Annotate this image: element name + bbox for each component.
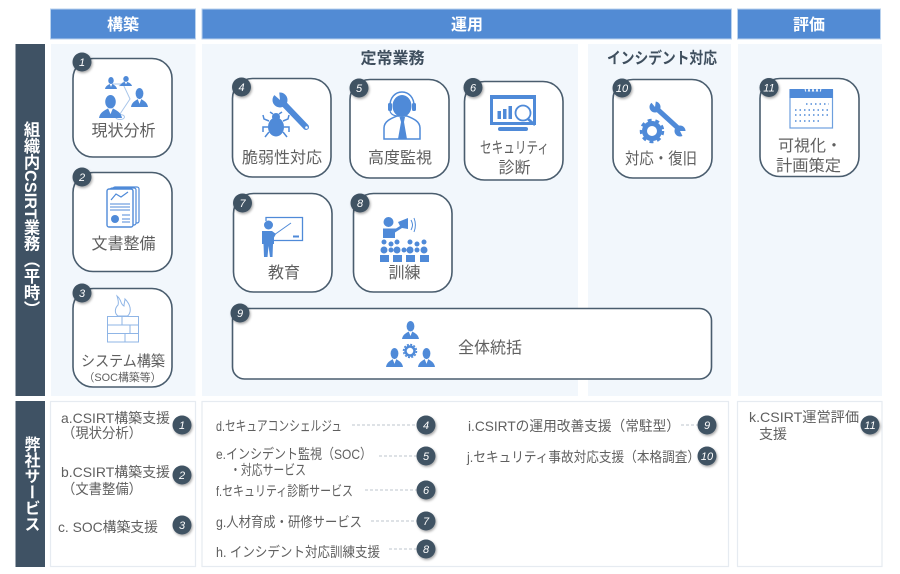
badge 3: 3 xyxy=(79,288,86,300)
header: 構築: 構築 xyxy=(107,15,139,34)
card 3: システム構築 xyxy=(73,288,172,387)
header: 評価 xyxy=(738,9,880,39)
badge 5 xyxy=(350,78,368,98)
service b: （文書整備） xyxy=(62,481,142,497)
badge 7 xyxy=(233,194,252,212)
card 9: 全体統括 xyxy=(232,308,712,379)
badge 4: 4 xyxy=(238,82,245,94)
header: 評価: 評価 xyxy=(793,16,825,34)
card 11: 可視化・計画策定: 可視化・ xyxy=(778,137,842,155)
badge 8: 8 xyxy=(357,198,364,210)
service a: a.CSIRT構築支援 xyxy=(61,410,170,426)
badge 2 xyxy=(72,168,92,186)
side label: 弊社サービス: 弊社サービス xyxy=(22,436,40,532)
side label: 組織内CSIRT業務（平時） xyxy=(16,44,45,396)
service b: b.CSIRT構築支援 xyxy=(61,464,170,480)
badge 10: 10 xyxy=(701,451,714,463)
card 4: 脆弱性対応 xyxy=(232,78,331,177)
card 2: 文書整備 xyxy=(73,172,172,272)
card 10: 対応・復旧 xyxy=(613,80,712,178)
service j: j.セキュリティ事故対応支援（本格調査） xyxy=(466,449,700,465)
badge 11 xyxy=(860,416,880,434)
service d: d.セキュアコンシェルジュ xyxy=(216,418,342,434)
badge 6: 6 xyxy=(470,82,477,94)
service g: g.人材育成・研修サービス xyxy=(216,514,362,530)
service panel: 構築 xyxy=(50,402,196,566)
badge 1 xyxy=(172,416,192,434)
badge 6: 6 xyxy=(423,485,430,497)
badge 7 xyxy=(416,512,436,530)
header: 構築 xyxy=(50,9,196,39)
icon: calendar xyxy=(790,87,833,128)
card 3: システム構築: システム構築 xyxy=(81,352,165,370)
header: 運用: 運用 xyxy=(451,16,483,34)
badge 8 xyxy=(350,194,370,212)
service panel: 運用 xyxy=(202,402,728,566)
service k: k.CSIRT運営評価 xyxy=(749,409,859,425)
card 5: 高度監視: 高度監視 xyxy=(368,149,432,167)
card 4: 脆弱性対応: 脆弱性対応 xyxy=(242,149,322,167)
service e: e.インシデント監視（SOC） xyxy=(216,446,372,462)
service a: （現状分析） xyxy=(62,425,142,441)
service a xyxy=(61,410,170,441)
card 8: 訓練: 訓練 xyxy=(388,264,421,282)
card 10: 対応・復旧: 対応・復旧 xyxy=(625,150,697,168)
badge 2 xyxy=(172,466,192,484)
card 7: 教育 xyxy=(234,194,332,292)
badge 6 xyxy=(416,480,436,500)
badge 8 xyxy=(416,540,436,558)
service c: c. SOC構築支援 xyxy=(58,519,158,535)
card 6: セキュリティ診断: セキュリティ xyxy=(480,140,549,157)
badge 10 xyxy=(612,78,632,98)
badge 6 xyxy=(464,78,482,97)
badge 11: 11 xyxy=(763,82,775,94)
badge 10: 10 xyxy=(616,83,629,95)
badge 5 xyxy=(416,446,436,466)
badge 9: 9 xyxy=(237,308,243,320)
icon: firewall xyxy=(108,296,138,342)
icon: documents xyxy=(107,187,139,227)
badge 7: 7 xyxy=(423,516,430,528)
card 6: セキュリティ診断 xyxy=(464,82,563,180)
badge 4: 4 xyxy=(423,420,429,432)
panel: 定常業務: 定常業務 xyxy=(360,50,425,68)
card 1: 現状分析 xyxy=(73,58,172,157)
card 7: 教育: 教育 xyxy=(268,264,300,282)
badge 3 xyxy=(72,284,92,302)
badge 5: 5 xyxy=(356,83,363,95)
badge 9 xyxy=(698,416,716,434)
badge 3 xyxy=(172,516,192,534)
badge 9: 9 xyxy=(704,420,710,432)
card 9: 全体統括: 全体統括 xyxy=(458,339,522,357)
icon: monitor and magnifier xyxy=(490,95,536,131)
badge 3: 3 xyxy=(179,520,186,532)
badge 1: 1 xyxy=(79,57,85,69)
icon: instructor with megaphone and audience xyxy=(380,217,429,262)
icon: wrench and bug xyxy=(263,90,308,137)
panel: インシデント対応 xyxy=(588,44,731,396)
panel: 評価 xyxy=(738,44,882,396)
card 3: システム構築: （SOC構築等） xyxy=(84,370,162,384)
badge 10 xyxy=(698,446,716,466)
card 11: 可視化・計画策定 xyxy=(760,78,859,176)
service f: f.セキュリティ診断サービス xyxy=(216,483,353,499)
service i: i.CSIRTの運用改善支援（常駐型） xyxy=(468,418,680,434)
service h: h. インシデント対応訓練支援 xyxy=(216,544,380,560)
service panel: 評価 xyxy=(738,402,882,566)
badge 2: 2 xyxy=(78,172,85,184)
badge 1: 1 xyxy=(179,420,185,432)
service b xyxy=(61,464,170,497)
badge 4 xyxy=(232,78,251,96)
badge 2: 2 xyxy=(178,470,185,482)
badge 11 xyxy=(760,78,778,97)
header: 運用 xyxy=(202,9,732,39)
badge 11: 11 xyxy=(864,420,876,432)
card 11: 可視化・計画策定: 計画策定 xyxy=(776,157,841,175)
badge 5: 5 xyxy=(423,451,430,463)
icon: people network xyxy=(99,76,148,120)
icon: teacher at whiteboard xyxy=(262,218,302,257)
service e xyxy=(216,446,417,478)
card 5: 高度監視 xyxy=(350,80,449,178)
badge 1 xyxy=(72,52,92,72)
card 1: 現状分析: 現状分析 xyxy=(91,122,156,140)
service k: 支援 xyxy=(759,426,787,442)
card 8: 訓練 xyxy=(354,194,452,292)
badge 8: 8 xyxy=(423,544,430,556)
badge 4 xyxy=(416,416,436,434)
icon: operator with headset xyxy=(384,92,420,139)
side label: 組織内CSIRT業務（平時）: 組織内CSIRT業務（平時） xyxy=(21,121,40,317)
icon: gear and wrench xyxy=(641,100,687,142)
service e: ・対応サービス xyxy=(230,462,306,478)
card 2: 文書整備: 文書整備 xyxy=(91,235,156,253)
side label: 弊社サービス xyxy=(16,401,45,567)
panel: 構築 xyxy=(51,44,196,396)
service k xyxy=(749,409,859,442)
badge 7: 7 xyxy=(239,198,246,210)
badge 9 xyxy=(230,304,250,322)
icon: team with gear xyxy=(386,321,435,367)
panel: インシデント対応: インシデント対応 xyxy=(607,48,717,68)
panel: 定常業務 xyxy=(202,44,578,396)
card 6: セキュリティ診断: 診断 xyxy=(498,159,531,177)
